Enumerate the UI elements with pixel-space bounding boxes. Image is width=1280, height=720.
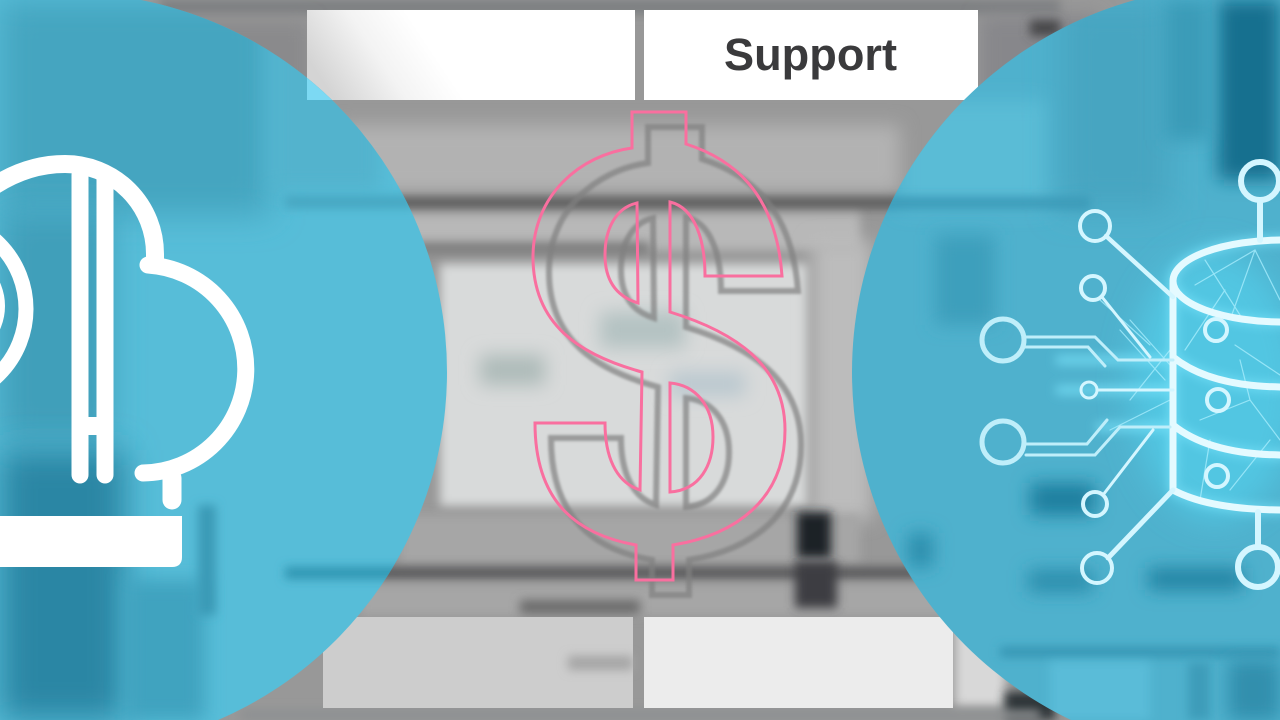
panel: right teal circle [840,0,1280,720]
icon: database with circuit nodes [982,162,1280,587]
panel: bottom left blank box [323,617,633,708]
dollar pink outline [533,112,785,580]
smudge on bottom left box [568,656,633,670]
panel: Support label box [644,10,978,100]
glow behind database [1060,240,1280,510]
icon: dollar sign with grey offset shadow [533,112,801,595]
panel: left teal circle [0,0,447,720]
icon: cloud computing outline [0,164,246,567]
highlight: circle over top left box [307,78,332,100]
network mesh inside cylinder [1100,250,1280,500]
heading: Support: Support [724,29,897,80]
panel: top left blank box [307,10,635,100]
panel: bottom right blank box [644,617,953,708]
dollar shadow [549,127,801,595]
